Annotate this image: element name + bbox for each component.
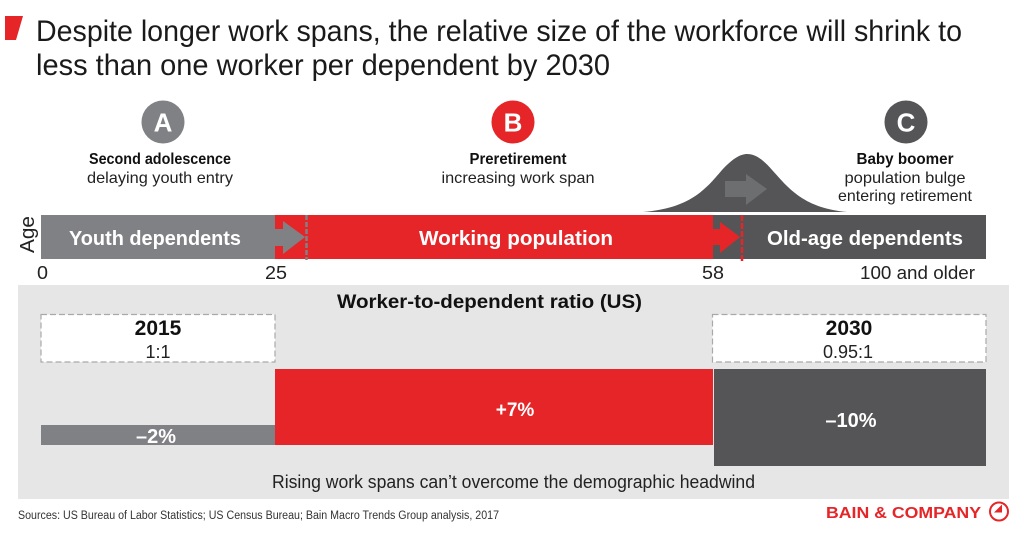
callout: 2030 ratio: 2030: [826, 317, 872, 340]
age bar: [41, 215, 986, 261]
panel takeaway: Rising work spans can’t overcome the demographic headwind: [272, 472, 755, 492]
callout C: baby boomer: C: [897, 108, 916, 138]
bar: working population change: +7%: [496, 400, 534, 421]
age axis labels: [37, 263, 975, 283]
title: [36, 15, 962, 82]
arrow: retirement shift: [713, 215, 742, 261]
panel: worker-to-dependent ratio: [18, 285, 1009, 499]
segment: working population: [275, 215, 713, 259]
callout B: preretirement: increasing work span: [442, 170, 594, 187]
callout A: second adolescence: Second adolescence: [89, 151, 231, 168]
segment: youth dependents: [41, 215, 275, 259]
callout: 2030 ratio: 0.95:1: [823, 342, 873, 362]
bar: youth change: [41, 425, 275, 448]
age axis labels: 0: [37, 263, 48, 283]
bar: old-age change: –10%: [825, 410, 877, 432]
axis label: age: Age: [17, 216, 39, 253]
bar: working population change: [275, 369, 713, 445]
callout: 2015 ratio: 2015: [135, 317, 182, 340]
title: Despite longer work spans, the relative size of the workforce will shrink to: [36, 15, 962, 48]
age axis labels: 100 and older: [860, 263, 975, 283]
title: less than one worker per dependent by 2030: [36, 49, 610, 82]
arrow: youth entry shift: [275, 215, 306, 260]
segment: old-age dependents: [713, 215, 986, 259]
segment: youth dependents: Youth dependents: [69, 228, 241, 250]
callout B: preretirement: [442, 100, 594, 187]
age axis labels: 58: [702, 263, 724, 283]
callout: 2030 ratio: [712, 314, 986, 362]
callout C: baby boomer: [838, 100, 973, 205]
callout C: baby boomer: Baby boomer: [856, 151, 954, 168]
bar: youth change: –2%: [136, 426, 176, 448]
callout B: preretirement: Preretirement: [470, 151, 567, 168]
age axis labels: 25: [265, 263, 287, 283]
icon: red title marker: [5, 16, 23, 40]
chart: population bulge with arrow: [643, 154, 847, 212]
logo: Bain & Company: BAIN & COMPANY: [826, 505, 981, 522]
sources note: Sources: US Bureau of Labor Statistics; US Census Bureau; Bain Macro Trends Group analysis, 2017: [18, 510, 499, 522]
bar: old-age change: [714, 369, 986, 466]
callout A: second adolescence: A: [154, 108, 173, 138]
callout: 2015 ratio: [41, 314, 275, 362]
callout A: second adolescence: delaying youth entry: [87, 170, 233, 187]
callout C: baby boomer: population bulge: [844, 170, 966, 187]
callout B: preretirement: B: [504, 108, 522, 138]
logo: Bain & Company: [826, 502, 1008, 522]
callout C: baby boomer: entering retirement: [838, 188, 973, 205]
callout: 2015 ratio: 1:1: [145, 342, 171, 362]
panel heading: Worker-to-dependent ratio (US): [337, 292, 642, 313]
segment: old-age dependents: Old-age dependents: [767, 228, 963, 250]
callout A: second adolescence: [87, 100, 233, 187]
segment: working population: Working population: [419, 228, 613, 250]
